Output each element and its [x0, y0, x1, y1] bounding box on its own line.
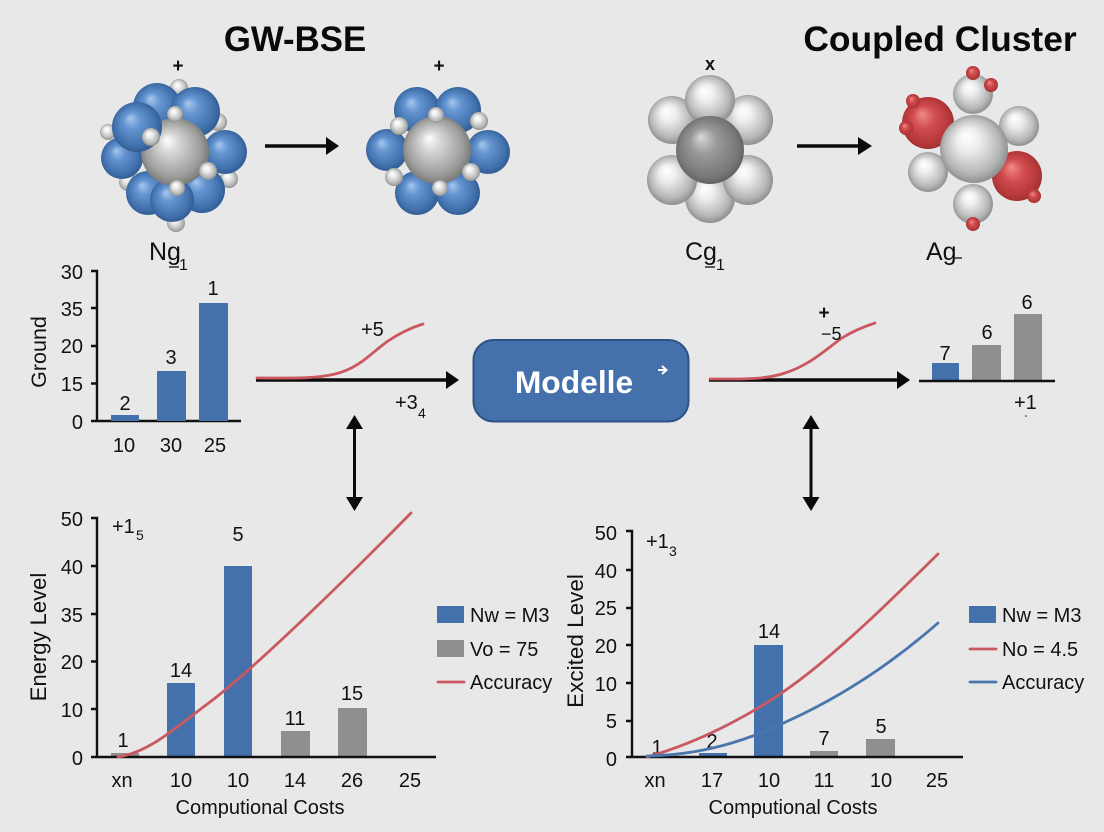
- bar labels: [119, 278, 219, 415]
- chart: excited level: [563, 523, 1084, 819]
- title: Coupled Cluster: Coupled Cluster: [803, 19, 1077, 59]
- y tick labels: 35: [61, 605, 83, 627]
- label: +3 sub 4: [395, 392, 426, 421]
- bar labels: 7: [939, 343, 951, 365]
- x tick labels: [644, 770, 948, 792]
- x tick labels: xn: [644, 770, 666, 792]
- charge marker: plus: +: [172, 56, 184, 77]
- bar labels: 1: [117, 730, 129, 752]
- legend: Nw = M3: [1002, 605, 1081, 627]
- arrow: right molecules: [797, 137, 872, 155]
- arrow: right vertical double: [802, 415, 820, 511]
- bars: [932, 314, 1042, 381]
- y tick labels: [595, 523, 617, 771]
- chart: small right bars: [919, 292, 1055, 417]
- arrow: left vertical double: [346, 415, 363, 511]
- bar labels: 11: [285, 708, 305, 730]
- bar labels: 1: [207, 278, 219, 300]
- annotation: +1 sub 5: [112, 516, 144, 543]
- x tick labels: [111, 770, 421, 792]
- y tick labels: 25: [595, 598, 617, 620]
- y tick labels: 10: [595, 674, 617, 696]
- curve: right trend: [710, 323, 875, 379]
- bar labels: 14: [170, 660, 192, 682]
- arrow: model to right chart: [709, 371, 910, 389]
- label: +5: +5: [361, 319, 384, 341]
- bar labels: [117, 524, 363, 752]
- y tick labels: 40: [595, 561, 617, 583]
- y tick labels: 0: [72, 412, 83, 434]
- annotation: +1 sub 3: [646, 531, 677, 559]
- x tick labels: xn: [111, 770, 133, 792]
- label: +1: +1: [1014, 392, 1037, 414]
- y tick labels: 10: [61, 700, 83, 722]
- bar labels: 6: [1021, 292, 1033, 314]
- x tick labels: 25: [926, 770, 948, 792]
- y tick labels: 30: [61, 262, 83, 284]
- axes: [91, 271, 241, 421]
- x tick labels: 30: [160, 435, 182, 457]
- y axis title: Ground: [27, 316, 51, 388]
- charge marker: x: x: [705, 54, 715, 74]
- molecule label: Ng: Ng: [149, 238, 181, 266]
- arrow: left molecules: [265, 137, 339, 155]
- accuracy curve: [118, 513, 411, 757]
- y tick labels: 5: [606, 711, 617, 733]
- curve: blue: [647, 623, 938, 756]
- legend: [969, 605, 1084, 694]
- label: plus minus 5: −5: [821, 324, 842, 344]
- molecule label: Cg: Cg: [685, 238, 717, 266]
- bar labels: 2: [119, 393, 131, 415]
- y axis title: Energy Level: [26, 573, 51, 701]
- x tick labels: 10: [870, 770, 892, 792]
- molecule: red and white cluster: [899, 66, 1042, 231]
- box: Modelle: [474, 340, 688, 422]
- x tick labels: 10: [170, 770, 192, 792]
- y tick labels: 35: [61, 299, 83, 321]
- bar labels: 15: [341, 683, 363, 705]
- y tick labels: 20: [61, 336, 83, 358]
- chart: energy level: [26, 509, 552, 819]
- bar labels: 14: [758, 621, 780, 643]
- x tick labels: [113, 435, 226, 457]
- y tick labels: 0: [72, 748, 83, 770]
- y tick labels: 50: [595, 523, 617, 545]
- legend: No = 4.5: [1002, 639, 1078, 661]
- x tick labels: 14: [284, 770, 306, 792]
- x tick labels: 26: [341, 770, 363, 792]
- annotation: +1 sub 5: +1: [112, 516, 135, 538]
- label: +3 sub 4: +3: [395, 392, 418, 414]
- bar labels: [939, 292, 1033, 365]
- y tick labels: 40: [61, 557, 83, 579]
- bar labels: 6: [981, 322, 993, 344]
- bars: [111, 303, 228, 421]
- bar labels: 5: [232, 524, 244, 546]
- bar labels: 5: [875, 716, 887, 738]
- label: +3 sub 4: 4: [418, 405, 426, 421]
- x axis title: Computional Costs: [176, 797, 344, 819]
- bars: [699, 645, 895, 757]
- chart: ground bars: [27, 262, 241, 457]
- x tick labels: 11: [814, 770, 834, 792]
- x tick labels: 25: [204, 435, 226, 457]
- molecule label: Cg: [685, 238, 725, 274]
- annotation: +1 sub 3: 3: [669, 543, 677, 559]
- axes: [91, 518, 436, 757]
- annotation: +1 sub 5: 5: [136, 527, 144, 543]
- molecule: blue cluster right: [366, 87, 510, 215]
- charge marker: plus right: +: [433, 56, 445, 77]
- x tick labels: 10: [113, 435, 135, 457]
- bar labels: 3: [165, 347, 177, 369]
- x tick labels: 10: [227, 770, 249, 792]
- legend: [437, 605, 552, 694]
- bars: [111, 566, 367, 757]
- molecule label: Ng: [149, 238, 188, 274]
- legend: Accuracy: [1002, 672, 1084, 694]
- x tick labels: 25: [399, 770, 421, 792]
- box: Modelle: Modelle: [515, 364, 633, 400]
- y tick labels: [61, 509, 83, 770]
- x axis title: Computional Costs: [709, 797, 877, 819]
- x tick labels: 10: [758, 770, 780, 792]
- title: GW-BSE: GW-BSE: [224, 20, 366, 59]
- y tick labels: 15: [61, 374, 83, 396]
- annotation: +1 sub 3: +1: [646, 531, 669, 553]
- bar labels: 7: [818, 728, 830, 750]
- legend: Vo = 75: [470, 639, 538, 661]
- x tick labels: 17: [701, 770, 723, 792]
- curve: red: [647, 554, 938, 757]
- legend: Accuracy: [470, 672, 552, 694]
- molecule label: Cg: 1: [716, 257, 725, 274]
- y tick labels: [61, 262, 83, 434]
- y tick labels: 0: [606, 749, 617, 771]
- bar labels: 1: [651, 737, 663, 759]
- label: plus minus 5: [818, 303, 842, 344]
- molecule: grey cluster: [647, 75, 773, 223]
- axes: [626, 531, 963, 757]
- molecule label: Ag: Ag: [926, 238, 957, 266]
- molecule label: Ng: 1: [179, 257, 188, 274]
- molecule: blue cluster left: [100, 79, 247, 232]
- y tick labels: 50: [61, 509, 83, 531]
- legend: Nw = M3: [470, 605, 549, 627]
- curve: left trend: [257, 324, 423, 378]
- y axis title: Excited Level: [563, 574, 588, 708]
- bar labels: 2: [706, 731, 718, 753]
- y tick labels: 20: [595, 636, 617, 658]
- baseline: [919, 380, 1055, 382]
- bar labels: [651, 621, 887, 759]
- label: plus minus 5: +: [818, 303, 830, 324]
- y tick labels: 20: [61, 652, 83, 674]
- arrow: ground chart to model: [256, 371, 459, 389]
